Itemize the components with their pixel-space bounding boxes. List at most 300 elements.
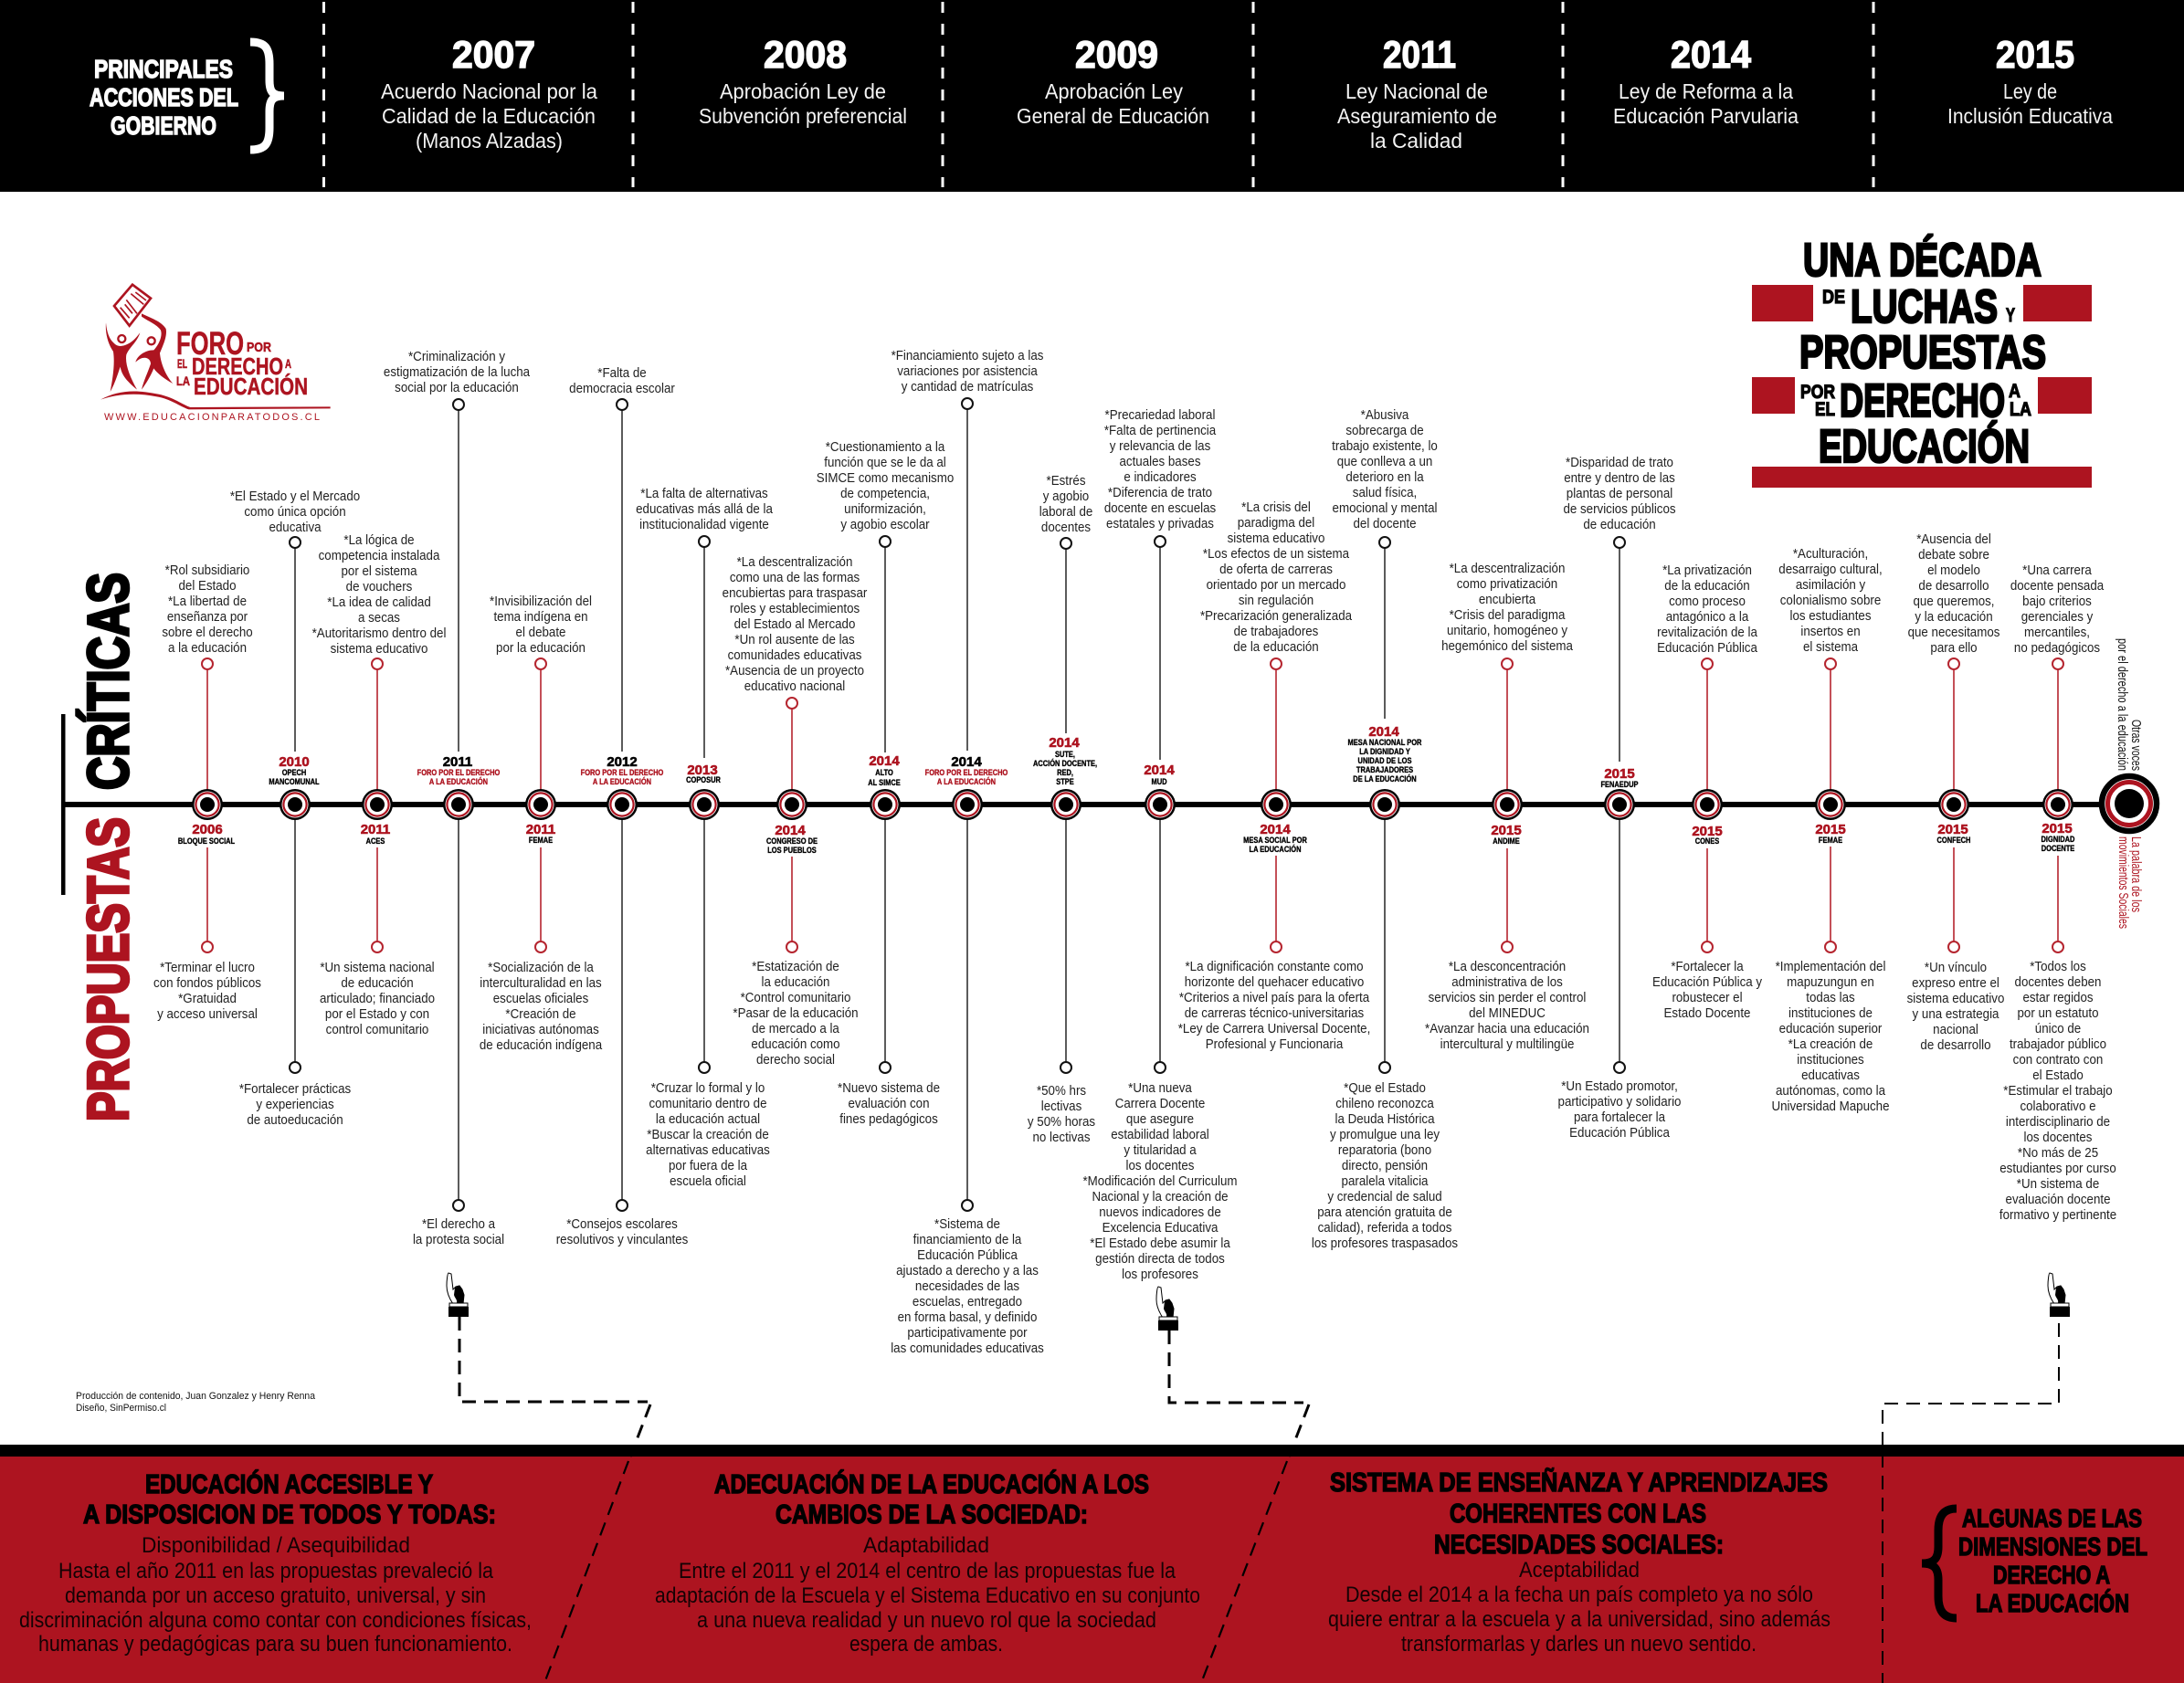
heading: principales acciones del gobierno: PRINCIPALES [94,55,233,83]
event: 2014 Foro por el Derecho a la Educación: las comunidades educativas [891,1341,1044,1356]
event: 2014 Mesa Social por la Educación: *Criterios a nivel país para la oferta [1179,990,1369,1005]
event: 2011 FEMAE: *Invisibilización del [490,594,592,609]
event: 2015 FEMAE: instituciones de [1788,1005,1873,1021]
side heading: propuestas: PROPUESTAS [77,817,141,1121]
event: 2015 Dignidad Docente: docente pensada [2010,578,2104,594]
event: 2014 Mesa Nacional por la Dignidad: UNIDAD DE LOS [1358,756,1412,765]
event: 2011 FEMAE: interculturalidad en las [480,975,602,991]
event: 2014 Mesa Nacional por la Dignidad [1312,407,1458,1251]
event: 2011 FEMAE: escuelas oficiales [493,991,588,1006]
title red bars [1752,285,2092,488]
event: 2015 FENAEDUP: de servicios públicos [1563,501,1676,517]
event: 2015 Dignidad Docente: estar regidos [2022,990,2094,1005]
event: 2014 Foro por el Derecho a la Educación: A LA EDUCACIÓN [937,775,996,786]
event: 2013 COPOSUR: *Buscar la creación de [647,1127,769,1142]
event: 2015 CONFECH: CONFECH [1937,836,1970,845]
rotated label: otras voces: por el derecho a la educación [2115,638,2130,771]
logo wordmark [176,326,308,400]
event: 2014 MUD: *Falta de pertinencia [1104,423,1216,438]
event: 2015 CONFECH: 2015 [1937,822,1968,837]
event: 2014 Mesa Nacional por la Dignidad: deterioro en la [1345,469,1424,485]
event: 2015 FEMAE: el sistema [1803,639,1858,655]
event: 2015 CONFECH: que queremos, [1914,594,1994,609]
event: 2006 Bloque Social [153,563,261,1022]
event: 2011 Foro por el Derecho a la Educación: estigmatización de la lucha [384,364,530,380]
event: 2014 Mesa Nacional por la Dignidad: *Que el Estado [1344,1080,1426,1096]
event: 2014 Alto al SIMCE: evaluación con [849,1096,929,1111]
heading: COHERENTES CON LAS [1450,1499,1706,1529]
heading: principales acciones del gobierno: ACCIONES DEL [90,83,238,111]
event: 2014 MUD: *Precariedad laboral [1105,407,1215,423]
government action 2007: Calidad de la Educación [382,104,596,128]
body text: demanda por un acceso gratuito, universal, y sin [65,1583,486,1608]
event: 2015 ANDIME: servicios sin perder el control [1429,990,1586,1005]
body text: Disponibilidad / Asequibilidad [142,1533,410,1558]
event: 2015 FEMAE: educación superior [1779,1021,1883,1036]
event: 2015 CONES: como proceso [1669,594,1746,609]
event: 2014 Congreso de los Pueblos: *Pasar de la educación [733,1005,859,1021]
event: 2014 Congreso de los Pueblos: del Estado al Mercado [734,616,855,632]
event: 2015 FEMAE: todas las [1806,990,1855,1005]
event: 2015 Dignidad Docente: colaborativo e [2020,1099,2096,1114]
event: 2015 CONFECH: y una estrategia [1913,1006,1999,1022]
event: 2015 CONES: robustecer el [1672,990,1743,1005]
event: 2015 Dignidad Docente: gerenciales y [2021,609,2094,625]
event: 2013 COPOSUR: *Cruzar lo formal y lo [651,1080,765,1096]
event: 2014 MUD: Excelencia Educativa [1103,1220,1218,1236]
event: 2015 ANDIME: unitario, homogéneo y [1447,623,1568,638]
event: 2014 Mesa Nacional por la Dignidad: MESA NACIONAL POR [1348,738,1421,747]
title words: EL [1815,399,1835,420]
event: 2013 COPOSUR: institucionalidad vigente [639,517,769,532]
event: 2015 FENAEDUP: de educación [1583,517,1656,532]
event: 2015 FEMAE: 2015 [1815,822,1846,837]
event: 2012 Foro por el Derecho a la Educación: resolutivos y vinculantes [556,1232,688,1247]
event: 2011 Foro por el Derecho a la Educación [384,349,530,1247]
event: 2011 ACES: 2011 [361,822,390,837]
event: 2014 MUD: MUD [1151,777,1167,786]
event: 2014 Foro por el Derecho a la Educación: Educación Pública [917,1247,1018,1263]
event: 2014 Foro por el Derecho a la Educación: *Sistema de [934,1216,1000,1232]
event: 2014 Alto al SIMCE: *Cuestionamiento a la [826,439,944,455]
end circle of the timeline [2102,776,2157,831]
event: 2014 MUD: los profesores [1122,1267,1198,1282]
event: 2014 SUTE, Acción Docente, RED, STPE: y 50% horas [1028,1114,1095,1130]
panel: government actions header band [0,0,2184,192]
event: 2011 Foro por el Derecho a la Educación: social por la educación [395,380,519,395]
event: 2015 Dignidad Docente: los docentes [2024,1130,2092,1145]
event: 2014 Mesa Nacional por la Dignidad: 2014 [1368,724,1399,740]
event: 2014 MUD: Carrera Docente [1115,1096,1205,1111]
event: 2015 FEMAE: autónomas, como la [1776,1083,1885,1099]
title words: UNA DÉCADA [1803,234,2042,286]
event: 2011 ACES: *Un sistema nacional [320,960,435,975]
event: 2014 Congreso de los Pueblos: *Control comunitario [741,990,851,1005]
event: 2014 Mesa Nacional por la Dignidad: LA DIGNIDAD Y [1359,747,1410,756]
government action 2015 [1947,33,2113,128]
icon: white brace [250,42,284,150]
event: 2015 Dignidad Docente: trabajador público [2010,1036,2106,1052]
event: 2015 FENAEDUP: FENAEDUP [1600,780,1639,789]
event: 2015 CONFECH: de desarrollo [1918,578,1989,594]
event: 2015 CONES [1652,563,1763,1021]
event: 2010 OPECH Mancomunal: de autoeducación [247,1112,343,1128]
event: 2014 Mesa Social por la Educación: LA EDUCACIÓN [1250,843,1302,854]
body text: adaptación de la Escuela y el Sistema Educativo en su conjunto [655,1583,1200,1608]
event: 2015 FEMAE: mapuzungun en [1787,974,1874,990]
event: 2014 Foro por el Derecho a la Educación: necesidades de las [915,1278,1019,1294]
event: 2011 ACES: *Autoritarismo dentro del [312,626,446,641]
logo wordmark: LA [176,373,190,388]
event: 2014 SUTE, Acción Docente, RED, STPE: *50% hrs [1037,1083,1086,1099]
event: 2014 Mesa Nacional por la Dignidad: trabajo existente, lo [1332,438,1438,454]
event: 2014 Congreso de los Pueblos: 2014 [775,823,806,838]
event: 2011 Foro por el Derecho a la Educación: *El derecho a [422,1216,495,1232]
event: 2014 SUTE, Acción Docente, RED, STPE: *Estrés [1047,473,1085,489]
event: 2014 Mesa Social por la Educación: Profesional y Funcionaria [1206,1036,1343,1052]
event: 2015 Dignidad Docente: interdisciplinario de [2006,1114,2110,1130]
event: 2014 Mesa Social por la Educación: de trabajadores [1234,624,1318,639]
event: 2014 MUD: y titularidad a [1124,1142,1197,1158]
title words: PROPUESTAS [1799,326,2046,378]
body text: quiere entrar a la escuela y a la universidad, sino además [1328,1607,1831,1632]
event: 2014 Mesa Social por la Educación: *Los efectos de un sistema [1203,546,1349,562]
logo wordmark: FORO [176,326,244,362]
event: 2013 COPOSUR: 2013 [687,763,718,778]
body text [19,1533,532,1657]
government action 2011: Ley Nacional de [1345,79,1488,103]
event: 2012 Foro por el Derecho a la Educación: FORO POR EL DERECHO [581,768,664,777]
heading [1958,1504,2147,1617]
event: 2011 ACES: a secas [358,610,400,626]
event: 2014 Mesa Social por la Educación: de la educación [1233,639,1319,655]
event: 2014 Congreso de los Pueblos [723,554,868,1068]
event: 2006 Bloque Social: con fondos públicos [153,975,261,991]
event: 2014 Congreso de los Pueblos: educación como [751,1036,840,1052]
event: 2014 Foro por el Derecho a la Educación: financiamiento de la [913,1232,1021,1247]
event: 2014 Mesa Nacional por la Dignidad: los profesores traspasados [1312,1236,1458,1251]
event: 2014 Mesa Social por la Educación: paradigma del [1238,515,1314,531]
event: 2015 FEMAE: colonialismo sobre [1780,593,1881,608]
heading: principales acciones del gobierno [90,55,238,140]
heading: CAMBIOS DE LA SOCIEDAD: [775,1500,1088,1530]
event: 2015 Dignidad Docente: estudiantes por curso [1999,1161,2116,1176]
event: 2015 CONFECH: nacional [1933,1022,1978,1037]
panel: sistema de enseñanza [1328,1467,1831,1657]
government action 2007: Acuerdo Nacional por la [381,79,597,103]
event: 2011 FEMAE: 2011 [526,822,555,837]
panel: bottom red band [0,1445,2184,1683]
event: 2014 Mesa Social por la Educación: de carreras técnico-universitarias [1185,1005,1364,1021]
event: 2015 CONES: CONES [1695,836,1720,846]
event: 2014 Congreso de los Pueblos: comunidades educativas [728,647,861,663]
event: 2015 Dignidad Docente: *Todos los [2030,959,2086,974]
event: 2014 Alto al SIMCE: SIMCE como mecanismo [817,470,954,486]
logo wordmark: EL [177,356,187,371]
event: 2015 CONES: de la educación [1664,578,1750,594]
event: 2013 COPOSUR: comunitario dentro de [649,1096,767,1111]
body text: discriminación alguna como contar con condiciones físicas, [19,1608,532,1633]
government action 2007: (Manos Alzadas) [416,129,563,153]
event: 2012 Foro por el Derecho a la Educación: 2012 [607,754,638,770]
event: 2015 CONES: Educación Pública [1657,640,1757,656]
event: 2006 Bloque Social: *Rol subsidiario [165,563,249,578]
event: 2012 Foro por el Derecho a la Educación: A LA EDUCACIÓN [593,775,651,786]
event: 2014 Alto al SIMCE: de competencia, [840,486,930,501]
event: 2014 Mesa Nacional por la Dignidad: la Deuda Histórica [1335,1111,1435,1127]
event: 2015 Dignidad Docente: el Estado [2032,1068,2084,1083]
event: 2011 Foro por el Derecho a la Educación: 2011 [443,754,472,770]
event: 2014 Alto al SIMCE: y agobio escolar [840,517,930,532]
event: 2012 Foro por el Derecho a la Educación: *Consejos escolares [566,1216,678,1232]
event: 2015 Dignidad Docente: bajo criterios [2022,594,2092,609]
icon: raised hand 2 [1156,1287,1178,1331]
event: 2012 Foro por el Derecho a la Educación [556,365,688,1247]
government action 2008: Aprobación Ley de [720,79,886,103]
event: 2015 CONFECH: y la educación [1915,609,1993,625]
event: 2013 COPOSUR: escuela oficial [670,1173,746,1189]
event: 2010 OPECH Mancomunal: *El Estado y el Mercado [230,489,360,504]
event: 2011 ACES: por el Estado y con [325,1006,429,1022]
event: 2014 Congreso de los Pueblos: de mercado a la [752,1021,839,1036]
event: 2015 ANDIME: encubierta [1479,592,1535,607]
event: 2014 Congreso de los Pueblos: la educación [762,974,829,990]
event: 2015 FEMAE: instituciones [1797,1052,1864,1068]
event: 2015 CONFECH: expreso entre el [1912,975,1999,991]
event: 2015 Dignidad Docente: por un estatuto [2018,1005,2099,1021]
event: 2015 ANDIME: *Avanzar hacia una educación [1425,1021,1589,1036]
event: 2014 Mesa Social por la Educación: sistema educativo [1228,531,1324,546]
event: 2014 Mesa Social por la Educación: orientado por un mercado [1207,577,1345,593]
icon: book and figures [100,285,331,409]
title words: POR [1800,382,1835,403]
rotated label: la palabra de los movimientos sociales: movimientos Sociales [2115,836,2131,929]
event: 2014 Congreso de los Pueblos: educativo nacional [744,678,845,694]
event: 2014 Congreso de los Pueblos: derecho social [756,1052,835,1068]
event: 2010 OPECH Mancomunal: educativa [269,520,322,535]
event: 2014 Mesa Nacional por la Dignidad: para atención gratuita de [1317,1204,1452,1220]
heading: LA EDUCACIÓN [1976,1589,2129,1617]
arrow: dashed connector to panel 1 [459,1317,650,1683]
event: 2014 Mesa Nacional por la Dignidad: *Abusiva [1361,407,1409,423]
panel: adecuación de la educación [655,1468,1200,1657]
logo: Foro por el Derecho a la Educación: WWW.EDUCACIONPARATODOS.CL [104,412,320,423]
event: 2011 ACES: competencia instalada [319,548,439,563]
government action 2011: 2011 [1383,33,1456,76]
event: 2014 Alto al SIMCE: función que se le da al [824,455,946,470]
event: 2015 CONFECH: sistema educativo [1907,991,2004,1006]
event: 2015 FENAEDUP: *Un Estado promotor, [1561,1078,1678,1094]
logo wordmark: A [285,356,291,371]
event: 2014 Congreso de los Pueblos: encubiertas para traspasar [723,585,868,601]
event: 2014 SUTE, Acción Docente, RED, STPE: no lectivas [1032,1130,1091,1145]
title words: Y [2006,305,2015,326]
event: 2014 Alto al SIMCE: *Nuevo sistema de [838,1080,940,1096]
heading: A DISPOSICION DE TODOS Y TODAS: [83,1500,496,1530]
event: 2014 SUTE, Acción Docente, RED, STPE: lectivas [1041,1099,1081,1114]
event: 2013 COPOSUR: por fuera de la [669,1158,747,1173]
event: 2011 ACES: control comunitario [326,1022,428,1037]
event: 2014 MUD: estabilidad laboral [1111,1127,1209,1142]
event: 2014 MUD: nuevos indicadores de [1099,1204,1221,1220]
event: 2011 ACES: articulado; financiado [320,991,435,1006]
event: 2006 Bloque Social: enseñanza por [167,609,248,625]
credits: Producción de contenido, Juan Gonzalez y Henry Renna [76,1391,316,1402]
event: 2014 Mesa Social por la Educación: 2014 [1260,822,1291,837]
body text: Entre el 2011 y el 2014 el centro de las propuestas fue la [679,1559,1176,1583]
event: 2014 MUD: Nacional y la creación de [1092,1189,1229,1204]
event: 2014 Congreso de los Pueblos: *La descentralización [737,554,852,570]
government action 2011 [1337,33,1497,153]
event: 2015 CONFECH: *Ausencia del [1916,531,1991,547]
event: 2015 CONES: antagónico a la [1666,609,1748,625]
event: 2015 FEMAE [1771,546,1890,1114]
body text: a una nueva realidad y un nuevo rol que la sociedad [697,1608,1156,1633]
credits [76,1391,316,1414]
event: 2015 Dignidad Docente: DIGNIDAD [2042,835,2074,844]
body text: transformarlas y darles un nuevo sentido. [1401,1632,1757,1657]
arrow: dashed connector to panel 2 [1169,1331,1309,1683]
timeline axis [61,714,2119,895]
logo wordmark: DERECHO [192,352,283,380]
event: 2006 Bloque Social: y acceso universal [157,1006,258,1022]
event: 2006 Bloque Social: *Terminar el lucro [160,960,255,975]
title words: DE [1822,287,1845,308]
event: 2014 MUD: que asegure [1126,1111,1194,1127]
event: 2013 COPOSUR [636,486,773,1189]
event: 2014 SUTE, Acción Docente, RED, STPE: y agobio [1043,489,1089,504]
event: 2010 OPECH Mancomunal: y experiencias [256,1097,334,1112]
event: 2015 ANDIME: como privatización [1457,576,1557,592]
event: 2011 FEMAE: el debate [516,625,566,640]
event: 2014 Mesa Social por la Educación: horizonte del quehacer educativo [1185,974,1364,990]
event: 2011 FEMAE: *Creación de [505,1006,576,1022]
event: 2014 Mesa Social por la Educación: de oferta de carreras [1219,562,1333,577]
event: 2014 Mesa Nacional por la Dignidad: calidad), referida a todos [1318,1220,1451,1236]
rotated label: otras voces [2115,638,2144,771]
event: 2015 ANDIME [1425,561,1589,1052]
event: 2014 Alto al SIMCE: AL SIMCE [868,778,901,787]
title words: EDUCACIÓN [1819,420,2030,472]
event: 2014 Congreso de los Pueblos: *Estatización de [752,959,839,974]
event: 2014 MUD: 2014 [1144,763,1175,778]
event: 2014 Mesa Nacional por la Dignidad: reparatoria (bono [1338,1142,1431,1158]
event: 2015 Dignidad Docente [1999,563,2116,1223]
heading [714,1468,1149,1530]
event: 2010 OPECH Mancomunal: OPECH [282,768,306,777]
rotated label: otras voces: Otras voces [2128,720,2144,771]
body text [1328,1558,1831,1657]
event: 2014 Mesa Social por la Educación [1178,500,1370,1052]
event: 2015 ANDIME: ANDIME [1493,836,1520,846]
event: 2014 Foro por el Derecho a la Educación: en forma basal, y definido [898,1310,1037,1325]
icon: black brace [1922,1509,1957,1618]
event: 2015 FENAEDUP: Educación Pública [1569,1125,1670,1141]
event: 2011 FEMAE: iniciativas autónomas [482,1022,599,1037]
heading [83,1468,496,1530]
event: 2015 CONES: revitalización de la [1657,625,1757,640]
event: 2014 Mesa Nacional por la Dignidad: salud física, [1353,485,1417,500]
logo wordmark: EDUCACIÓN [194,373,308,400]
event: 2006 Bloque Social: BLOQUE SOCIAL [178,836,235,846]
event: 2014 Mesa Nacional por la Dignidad: y credencial de salud [1327,1189,1442,1204]
title words: A [2009,381,2020,402]
event: 2011 FEMAE: FEMAE [529,836,554,845]
event: 2015 CONES: *La privatización [1662,563,1752,578]
event: 2013 COPOSUR: COPOSUR [686,775,721,784]
event: 2014 MUD: los docentes [1126,1158,1194,1173]
body text: Desde el 2014 a la fecha un país completo ya no sólo [1345,1583,1813,1607]
event: 2015 Dignidad Docente: formativo y pertinente [1999,1207,2116,1223]
event: 2015 Dignidad Docente: *No más de 25 [2018,1145,2098,1161]
government action 2008: Subvención preferencial [699,104,907,128]
event: 2014 Mesa Social por la Educación: MESA SOCIAL POR [1243,836,1307,845]
body text: Aceptabilidad [1519,1558,1640,1583]
title words: LUCHAS [1851,280,1998,332]
event: 2014 Foro por el Derecho a la Educación: ajustado a derecho y a las [896,1263,1039,1278]
event: 2015 ANDIME: administrativa de los [1451,974,1563,990]
event: 2006 Bloque Social: 2006 [192,822,223,837]
title words [1799,234,2046,472]
panel: educación accesible [19,1468,532,1657]
event: 2014 MUD: docente en escuelas [1104,500,1216,516]
event: 2015 FEMAE: insertos en [1800,624,1861,639]
event: 2014 Foro por el Derecho a la Educación: y cantidad de matrículas [902,379,1033,394]
event: 2010 OPECH Mancomunal [230,489,360,1128]
heading: ADECUACIÓN DE LA EDUCACIÓN A LOS [714,1468,1149,1499]
event: 2015 Dignidad Docente: con contrato con [2013,1052,2103,1068]
event: 2014 MUD: y relevancia de las [1110,438,1210,454]
event: 2014 MUD [1082,407,1238,1282]
heading: SISTEMA DE ENSEÑANZA Y APRENDIZAJES [1330,1467,1828,1498]
event: 2014 Congreso de los Pueblos: *Ausencia de un proyecto [725,663,864,678]
event: 2015 Dignidad Docente: *Un sistema de [2017,1176,2099,1192]
title: una década de luchas y propuestas por el derecho a la educación [1752,234,2092,488]
event: 2015 CONES: 2015 [1692,824,1723,839]
event: 2014 SUTE, Acción Docente, RED, STPE: laboral de [1039,504,1092,520]
title words: DERECHO [1840,374,2005,426]
event: 2011 ACES: *La idea de calidad [327,594,431,610]
heading: DERECHO A [1993,1561,2110,1589]
government action 2009: 2009 [1075,33,1158,76]
event: 2014 MUD: *Diferencia de trato [1108,485,1212,500]
event: 2014 Alto al SIMCE: uniformización, [844,501,926,517]
event: 2014 Mesa Nacional por la Dignidad: paralela vitalicia [1342,1173,1429,1189]
event: 2014 SUTE, Acción Docente, RED, STPE: docentes [1041,520,1091,535]
government action 2014: Ley de Reforma a la [1619,79,1793,103]
event: 2015 FEMAE: asimilación y [1796,577,1866,593]
government action 2014: Educación Parvularia [1613,104,1799,128]
event: 2010 OPECH Mancomunal: como única opción [244,504,346,520]
event: 2014 Mesa Social por la Educación: *Ley de Carrera Universal Docente, [1178,1021,1370,1036]
rotated label: la palabra de los movimientos sociales: La palabra de los [2128,836,2144,912]
event: 2014 Mesa Nacional por la Dignidad: del docente [1354,516,1417,531]
event: 2011 Foro por el Derecho a la Educación: la protesta social [413,1232,504,1247]
event: 2010 OPECH Mancomunal: MANCOMUNAL [269,777,320,786]
event: 2006 Bloque Social: a la educación [168,640,247,656]
event: 2011 FEMAE: tema indígena en [493,609,588,625]
event: 2011 ACES: sistema educativo [331,641,427,657]
arrow: dashed connector to panel 3 [1883,1323,2059,1683]
event: 2014 Foro por el Derecho a la Educación: *Financiamiento sujeto a las [892,348,1043,363]
government action 2008 [699,33,907,128]
event: 2006 Bloque Social: sobre el derecho [162,625,253,640]
event: 2011 Foro por el Derecho a la Educación: *Criminalización y [408,349,506,364]
event: 2014 Mesa Nacional por la Dignidad: chileno reconozca [1335,1096,1434,1111]
event: 2014 Mesa Nacional por la Dignidad: directo, pensión [1342,1158,1428,1173]
event: 2015 FENAEDUP: 2015 [1604,766,1635,782]
event: 2014 MUD: actuales bases [1120,454,1200,469]
